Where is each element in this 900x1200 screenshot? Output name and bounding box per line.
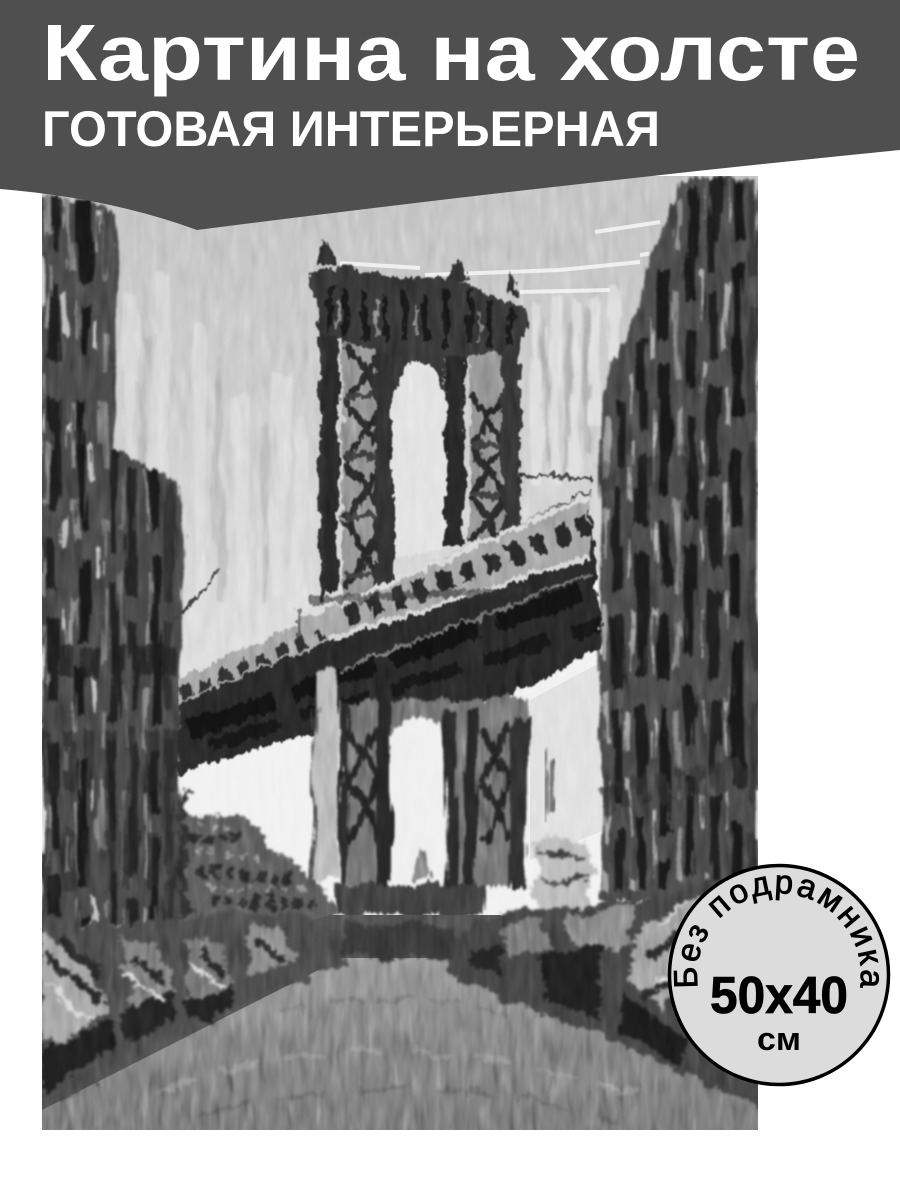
parked cars left [42,909,350,1102]
size badge [668,864,890,1086]
bridge tower lower [313,670,528,915]
bridge deck [175,475,602,775]
canvas brush texture [42,176,758,1130]
sky [42,176,758,716]
left buildings [42,196,182,930]
trees and distant buildings [185,790,590,930]
bridge tower upper [308,236,528,600]
subtitle: ГОТОВАЯ ИНТЕРЬЕРНАЯ [42,101,660,157]
header banner [0,0,900,230]
badge arc text: Без подрамника [674,875,880,988]
title: Картина на холсте [42,8,860,97]
right buildings [600,176,758,900]
badge size: 50x40 [710,967,848,1025]
sky under bridge [178,570,605,920]
painting: Manhattan Bridge street scene [30,176,770,1130]
parked cars right [345,880,770,1110]
badge unit: см [757,1021,801,1057]
road [42,915,758,1130]
